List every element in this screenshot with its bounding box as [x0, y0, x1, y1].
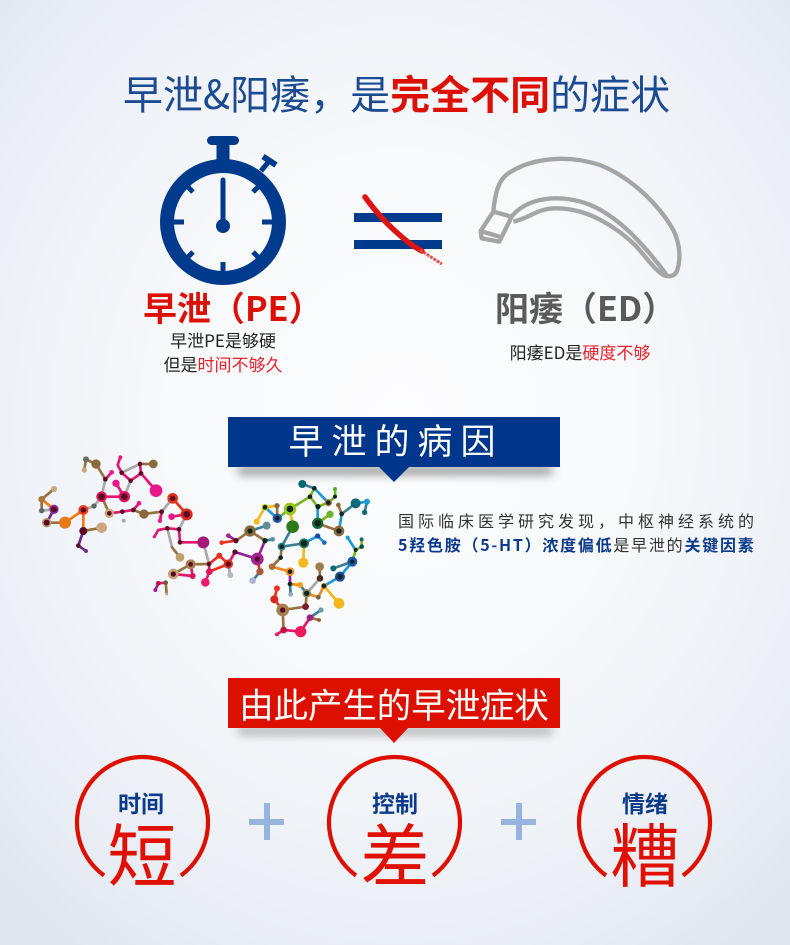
- text: PE description: 但是时间不够久: [164, 351, 282, 376]
- text: clinical research finding: [398, 508, 758, 556]
- text: PE description: [164, 327, 282, 376]
- title: 早泄&阳痿，是完全不同的症状: [123, 63, 670, 121]
- symptom: poor control: 控制: [372, 785, 418, 819]
- symptom: short time: 时间: [118, 785, 164, 819]
- banner: causes: [228, 414, 560, 482]
- symptom: bad mood: 糟: [610, 801, 680, 901]
- heading: PE: 早泄（PE）: [143, 282, 323, 331]
- text: clinical research finding: 国际临床医学研究发现，中枢神经系统的: [398, 508, 758, 532]
- banner: resulting symptoms: 由此产生的早泄症状: [239, 678, 549, 728]
- plus sign: [249, 803, 284, 840]
- text: ED description: 阳痿ED是硬度不够: [510, 339, 650, 364]
- symptom: poor control: 差: [360, 801, 430, 901]
- banner: causes: 早泄的病因: [288, 414, 504, 465]
- heading: ED: 阳痿（ED）: [495, 282, 676, 331]
- text: clinical research finding: 5羟色胺（5-HT）浓度偏低是早泄的关键因素: [398, 532, 755, 556]
- symptom: short time: 短: [108, 801, 176, 901]
- symptom: bad mood: 情绪: [622, 785, 668, 819]
- text: PE description: 早泄PE是够硬: [170, 327, 276, 352]
- plus sign: [501, 803, 536, 840]
